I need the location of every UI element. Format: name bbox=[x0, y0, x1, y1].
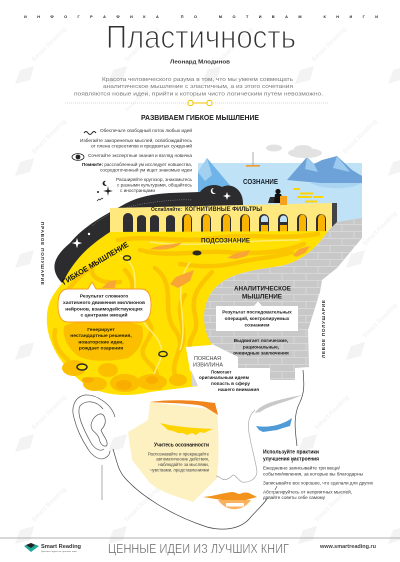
text: Smart Reading bbox=[217, 26, 255, 63]
text: Smart Reading bbox=[123, 486, 161, 523]
intro text: аналитическое мышление с эластичным, а из этого сочетания bbox=[103, 84, 293, 90]
tips list: Расширяйте кругозор, знакомьтесь bbox=[116, 176, 193, 182]
icon: sailboat bbox=[246, 152, 260, 167]
face outline: jaw bbox=[113, 449, 267, 529]
panel: mindfulness cream face: чувствами, представлениями bbox=[150, 468, 210, 472]
title: Пластичность bbox=[106, 19, 296, 55]
text: Smart Reading bbox=[124, 84, 153, 113]
callout: chaotic movement: нейронов, взаимодействующих bbox=[65, 306, 143, 312]
heading: analytic thinking bbox=[234, 286, 291, 300]
heading: cognitive filters bbox=[151, 206, 262, 213]
eyebrow bbox=[150, 400, 218, 415]
text: logical conclusions: очевидные заключения bbox=[233, 350, 289, 356]
icon: eye bbox=[72, 154, 84, 160]
heading: subconscious: ПОДСОЗНАНИЕ bbox=[201, 238, 251, 244]
orange boats bbox=[102, 242, 310, 288]
gold blobs bbox=[62, 320, 187, 392]
mountains left bbox=[198, 158, 240, 215]
mountains right bbox=[287, 156, 362, 188]
panel: flexible thinking yellow hemisphere bbox=[47, 231, 328, 395]
right eyebrow bbox=[255, 395, 302, 413]
text: Smart Reading bbox=[30, 486, 68, 523]
icon: wave bbox=[84, 132, 96, 134]
text: logical conclusions: Выдвигает логические, bbox=[234, 338, 288, 343]
eyelashes bbox=[160, 423, 213, 435]
callout: sequential operations: сознанием bbox=[245, 322, 270, 328]
arcade wall: cognitive filters bbox=[110, 203, 337, 233]
text: Smart Reading bbox=[30, 118, 68, 155]
callout: sequential operations bbox=[216, 302, 298, 331]
clouds bbox=[266, 144, 322, 158]
heading: flexible thinking curved: ГИБКОЕ МЫШЛЕНИЕ bbox=[60, 240, 130, 287]
tips list: с иностранцами bbox=[120, 188, 155, 193]
tips list: Избегайте закоренелых мыслей, освобождайтесь bbox=[80, 137, 193, 143]
footer tagline: ЦЕННЫЕ ИДЕИ ИЗ ЛУЧШИХ КНИГ bbox=[108, 541, 289, 556]
callout: chaotic movement: с центрами эмоций bbox=[80, 312, 128, 318]
top label: И Н Ф О Г Р А Ф И К А П О М О Т И В А М К Н И Г И bbox=[24, 15, 378, 19]
eyes bbox=[77, 250, 202, 370]
website: www.smartreading.ru bbox=[319, 544, 376, 550]
panel: mindfulness cream face: наблюдайте за мыслями, bbox=[158, 462, 209, 467]
callout: sequential operations: Результат последовательных bbox=[222, 310, 292, 314]
label: left hemisphere: ЛЕВОЕ ПОЛУШАРИЕ bbox=[321, 300, 326, 358]
text: Smart Reading bbox=[341, 118, 379, 155]
text: generates: новаторские идеи, bbox=[78, 340, 124, 346]
text: Smart Reading bbox=[361, 210, 399, 247]
heading: cingulate gyrus: ПОЯСНАЯ bbox=[194, 356, 221, 362]
text: generates bbox=[70, 327, 132, 352]
text: Smart Reading bbox=[313, 394, 351, 431]
callout: chaotic movement bbox=[58, 282, 151, 322]
text: logical conclusions bbox=[233, 338, 289, 356]
text: generates: рождает озарения bbox=[79, 346, 123, 352]
night sky bbox=[54, 185, 243, 283]
footer rule bbox=[0, 537, 400, 539]
callout: chaotic movement: хаотичного движения миллионов bbox=[63, 301, 145, 306]
heading: analytic thinking: АНАЛИТИЧЕСКОЕ bbox=[234, 286, 291, 292]
icon: logo bbox=[24, 543, 39, 552]
tips list: сосредоточенный ум ищет знакомые идеи bbox=[100, 166, 192, 172]
tips list: Сочетайте экспертные знания и взгляд новичка bbox=[88, 152, 192, 158]
face outline: neck line bbox=[101, 465, 103, 500]
text: Smart Reading bbox=[30, 394, 68, 431]
heading: cingulate gyrus bbox=[193, 356, 223, 368]
intro text bbox=[74, 77, 324, 98]
brand name: Smart Reading bbox=[41, 544, 82, 550]
flowing bands bbox=[54, 234, 318, 388]
text: Smart Reading bbox=[313, 486, 351, 523]
text: mood practices: события/явления, за которые вы благодарны bbox=[263, 472, 363, 476]
text: mood practices: Используйте практики bbox=[263, 448, 319, 456]
panel: cingulate gyrus: попасть в сферу bbox=[211, 381, 251, 386]
text: mood practices: давайте советы себе самому bbox=[263, 495, 326, 500]
panel: mindfulness cream face: автоматические действия, bbox=[156, 456, 209, 462]
text: Smart Reading bbox=[361, 302, 399, 339]
text: mood practices: Абстрагируйтесь от неприятных мыслей, bbox=[263, 490, 352, 494]
tips list: с разными культурами, общайтесь bbox=[117, 182, 193, 188]
divider ornament bbox=[65, 100, 328, 106]
nose bbox=[216, 410, 257, 482]
brand name bbox=[41, 544, 82, 553]
intro text: Красота человеческого разума в том, что мы умеем совмещать bbox=[102, 77, 293, 83]
panel: cingulate gyrus: оригинальным идеям bbox=[199, 375, 249, 380]
intro text: появляются новые идеи, прийти к которым чисто логическим путем невозможно. bbox=[74, 90, 324, 98]
face outline: right temple bbox=[295, 370, 304, 446]
tips list: Помните: расслабленный ум исследует новшества, bbox=[82, 161, 192, 167]
panel: cingulate gyrus bbox=[186, 345, 270, 392]
tips list bbox=[72, 127, 193, 193]
panel: analytic thinking brick hemisphere bbox=[204, 218, 362, 380]
text: generates: Генерирует bbox=[87, 327, 115, 333]
brand name: Ценные идеи из лучших книг bbox=[41, 551, 77, 553]
heading: cognitive filters: Ослабляйте: bbox=[151, 206, 182, 213]
tips list: от плена стереотипов и предвзятых суждений bbox=[91, 142, 192, 148]
panel: cingulate gyrus: нашего внимания bbox=[218, 387, 259, 392]
text: generates: нестандартные решения, bbox=[70, 334, 132, 339]
text: Smart Reading bbox=[30, 26, 68, 63]
panel: cingulate gyrus: Помогает bbox=[211, 370, 232, 374]
panel: consciousness landscape bbox=[198, 144, 362, 225]
callout: sequential operations: операций, контролируемых bbox=[225, 315, 290, 321]
text: mood practices: улучшения настроения bbox=[263, 456, 319, 462]
tips list: Обеспечьте свободный поток любых идей bbox=[100, 127, 192, 133]
label: right hemisphere: ПРАВОЕ ПОЛУШАРИЕ bbox=[40, 222, 45, 285]
right eyelashes bbox=[256, 418, 292, 432]
heading: consciousness: СОЗНАНИЕ bbox=[243, 179, 278, 186]
heading: flexible thinking: РАЗВИВАЕМ ГИБКОЕ МЫШЛЕНИЕ bbox=[141, 113, 259, 122]
lips bbox=[203, 492, 257, 509]
panel: mindfulness cream face: Распознавайте и прекращайте bbox=[148, 452, 210, 456]
figure with book and letters bbox=[268, 188, 323, 205]
text: mood practices bbox=[263, 448, 374, 500]
text: Smart Reading bbox=[123, 26, 161, 63]
heading: cingulate gyrus: ИЗВИЛИНА bbox=[193, 362, 223, 368]
icon: stars bbox=[97, 181, 113, 201]
heading: cognitive filters: КОГНИТИВНЫЕ ФИЛЬТРЫ bbox=[185, 206, 262, 213]
heading: analytic thinking: МЫШЛЕНИЕ bbox=[242, 294, 282, 300]
text: mood practices: Записывайте все хорошее, что сделали для других bbox=[263, 480, 374, 486]
author: Леонард Млодинов bbox=[170, 60, 231, 66]
text: mood practices: Ежедневно записывайте три вещи/ bbox=[263, 466, 341, 470]
heading: mindfulness: Учитесь осознанности bbox=[154, 442, 209, 448]
text: logical conclusions: рациональные, bbox=[243, 344, 279, 350]
text: Smart Reading bbox=[310, 26, 348, 63]
panel: mindfulness cream face bbox=[128, 400, 218, 502]
callout: chaotic movement: Результат сложного bbox=[80, 294, 128, 300]
face outline: ear bbox=[73, 395, 115, 459]
